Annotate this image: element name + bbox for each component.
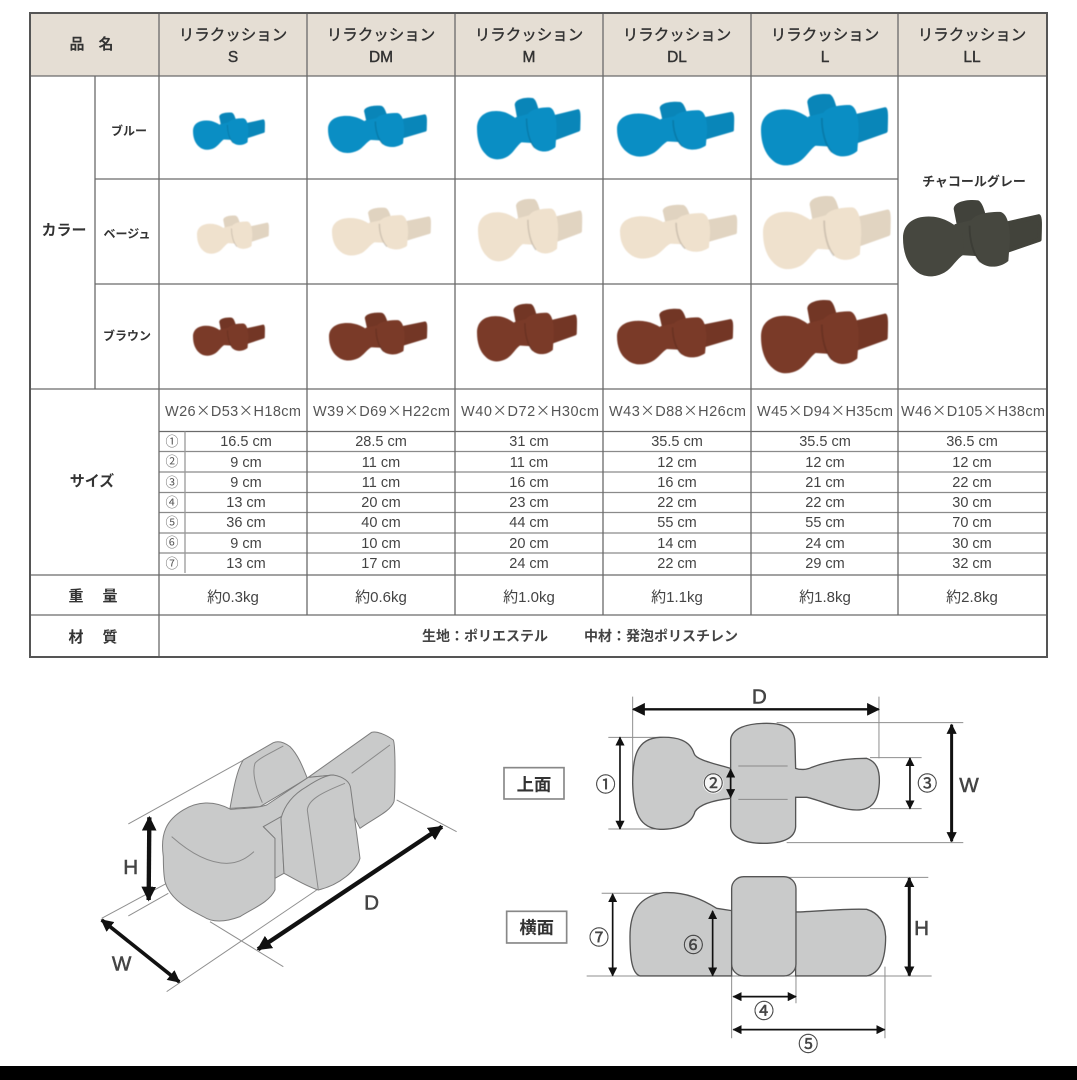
measurement values: 31 cm — [509, 434, 549, 450]
overall dimensions row: W39×D69×H22cm — [313, 400, 450, 421]
measurement values: 12 cm — [952, 455, 992, 471]
weight row: 約1.0kg — [503, 589, 555, 606]
guide lines — [102, 758, 457, 992]
measurement values: 13 cm — [226, 495, 266, 511]
arrow: W — [102, 920, 179, 982]
measurement values: 9 cm — [230, 536, 262, 552]
measurement values: 36 cm — [226, 515, 266, 531]
measurement values: 35.5 cm — [651, 434, 703, 450]
measurement values: 70 cm — [952, 515, 992, 531]
measurement values: 35.5 cm — [799, 434, 851, 450]
weight row: 約1.1kg — [651, 589, 703, 606]
brown cushions — [193, 300, 886, 373]
label: D: D — [364, 891, 379, 914]
measurement numbers column: ① — [165, 434, 179, 449]
side view callouts: H — [914, 917, 929, 940]
weight row: 約0.3kg — [207, 589, 259, 606]
header row labels: 品 — [69, 36, 85, 53]
colour section labels: ブルー — [111, 123, 147, 138]
measurement values: 14 cm — [657, 536, 697, 552]
colour section labels: ベージュ — [104, 227, 150, 241]
label: W: W — [112, 953, 132, 976]
colour section labels: ブラウン — [103, 328, 151, 343]
header row labels: リラクッション — [623, 26, 731, 44]
measurement values: 9 cm — [230, 455, 262, 471]
perspective dimension diagram — [102, 732, 457, 992]
measurement values: 16.5 cm — [220, 434, 272, 450]
arrow: 1 — [617, 737, 622, 829]
measurement values: 55 cm — [805, 515, 845, 531]
arrow: H — [142, 817, 156, 900]
label: top view: 上面 — [517, 774, 551, 794]
measurement values: 28.5 cm — [355, 434, 407, 450]
measurement numbers column: ④ — [165, 495, 179, 510]
header row background — [30, 13, 1047, 76]
measurement values: 12 cm — [805, 455, 845, 471]
material row — [68, 628, 738, 646]
top view guide lines — [608, 697, 963, 843]
header row labels — [69, 26, 1026, 66]
weight row: 約2.8kg — [946, 589, 998, 606]
label: top view — [504, 768, 564, 799]
measurement values: 20 cm — [361, 495, 401, 511]
weight row: 約0.6kg — [355, 589, 407, 606]
measurement values: 29 cm — [805, 556, 845, 572]
measurement values: 30 cm — [952, 495, 992, 511]
measurement values: 21 cm — [805, 475, 845, 491]
charcoal grey cushion — [903, 200, 1040, 276]
top view callouts: ② — [703, 772, 723, 795]
side view — [507, 877, 932, 1056]
top view callouts: D — [752, 685, 767, 708]
material row: 生地：ポリエステル — [422, 628, 548, 644]
top view — [504, 685, 979, 843]
measurement values: 32 cm — [952, 556, 992, 572]
label: H: H — [123, 856, 138, 879]
top view callouts: W — [959, 774, 979, 797]
measurement values: 20 cm — [509, 536, 549, 552]
measurement values: 10 cm — [361, 536, 401, 552]
size section label: サイズ — [70, 472, 114, 490]
overall dimensions row: W40×D72×H30cm — [461, 400, 599, 421]
measurement values: 22 cm — [657, 495, 697, 511]
measurement values: 16 cm — [509, 475, 549, 491]
overall dimensions row — [165, 400, 1045, 421]
measurement values: 22 cm — [805, 495, 845, 511]
header row labels: DL — [667, 49, 687, 66]
header row labels: リラクッション — [918, 26, 1026, 44]
side view callouts: ⑤ — [798, 1033, 818, 1056]
side view callouts — [589, 917, 929, 1056]
side view callouts: ⑥ — [683, 934, 703, 957]
arrow: H side — [905, 878, 914, 976]
colour section labels: カラー — [41, 222, 87, 239]
measurement values: 12 cm — [657, 455, 697, 471]
header row labels: リラクッション — [771, 26, 879, 44]
measurement values: 16 cm — [657, 475, 697, 491]
header row labels: リラクッション — [179, 26, 287, 44]
measurement values: 36.5 cm — [946, 434, 998, 450]
side view guide lines — [587, 877, 932, 1038]
header row labels: LL — [963, 49, 981, 66]
cushion drawing — [162, 732, 395, 921]
arrow: 4 — [733, 994, 796, 999]
measurement values: 22 cm — [952, 475, 992, 491]
weight row — [68, 587, 998, 606]
blue cushions — [193, 94, 886, 165]
top and side view diagrams — [504, 685, 979, 1056]
top view silhouette — [633, 723, 879, 843]
side view silhouette — [630, 877, 886, 976]
measurement values: 30 cm — [952, 536, 992, 552]
arrow: 2 — [728, 769, 733, 797]
measurement values: 55 cm — [657, 515, 697, 531]
weight row: 約1.8kg — [799, 589, 851, 606]
measurement values — [220, 434, 998, 572]
measurement values: 44 cm — [509, 515, 549, 531]
measurement values: 23 cm — [509, 495, 549, 511]
material row: 質 — [102, 629, 118, 646]
material row: 材 — [68, 628, 84, 646]
overall dimensions row: W43×D88×H26cm — [609, 400, 746, 421]
measurement values: 9 cm — [230, 475, 262, 491]
measurement values: 17 cm — [361, 556, 401, 572]
header row labels: リラクッション — [327, 26, 435, 44]
arrow: 5 — [733, 1027, 885, 1032]
measurement numbers column: ⑤ — [165, 515, 179, 530]
measurement numbers column: ② — [165, 454, 179, 469]
specification table — [30, 13, 1047, 657]
measurement numbers column: ③ — [165, 475, 179, 490]
arrow: 6 — [710, 911, 715, 976]
measurement values: 13 cm — [226, 556, 266, 572]
header row labels: L — [821, 49, 830, 66]
label: side view — [507, 911, 567, 943]
overall dimensions row: W26×D53×H18cm — [165, 400, 301, 421]
measurement values: 24 cm — [805, 536, 845, 552]
measurement values: 11 cm — [362, 455, 400, 471]
weight row: 重 — [68, 587, 84, 605]
colour section labels: チャコールグレー — [922, 174, 1026, 189]
top view callouts — [596, 685, 979, 797]
label: side view: 横面 — [519, 918, 554, 938]
measurement numbers column — [165, 434, 179, 571]
arrow: 7 — [610, 894, 615, 976]
header row labels: S — [228, 49, 238, 66]
arrow: D top — [633, 706, 879, 713]
weight row: 量 — [102, 588, 118, 605]
measurement values: 11 cm — [510, 455, 548, 471]
header row labels: M — [523, 49, 535, 66]
overall dimensions row: W46×D105×H38cm — [901, 400, 1045, 421]
bottom black band — [0, 1066, 1077, 1080]
top view callouts: ③ — [917, 773, 937, 796]
arrow: W top — [947, 725, 956, 841]
measurement values: 24 cm — [509, 556, 549, 572]
side view callouts: ④ — [754, 1000, 774, 1023]
header row labels: DM — [369, 49, 393, 66]
measurement values: 40 cm — [361, 515, 401, 531]
measurement values: 11 cm — [362, 475, 400, 491]
top view callouts: ① — [596, 773, 616, 796]
arrow: D — [258, 827, 442, 949]
measurement numbers column: ⑥ — [165, 535, 179, 550]
beige cushions — [197, 196, 889, 269]
table grid lines — [30, 13, 1047, 657]
header row labels: 名 — [98, 35, 114, 53]
side view callouts: ⑦ — [589, 926, 609, 949]
material row: 中材：発泡ポリスチレン — [584, 628, 738, 644]
arrow: 3 — [907, 758, 912, 809]
overall dimensions row: W45×D94×H35cm — [757, 400, 893, 421]
header row labels: リラクッション — [475, 26, 583, 44]
colour section labels — [41, 123, 1026, 343]
measurement values: 22 cm — [657, 556, 697, 572]
measurement numbers column: ⑦ — [165, 556, 179, 571]
